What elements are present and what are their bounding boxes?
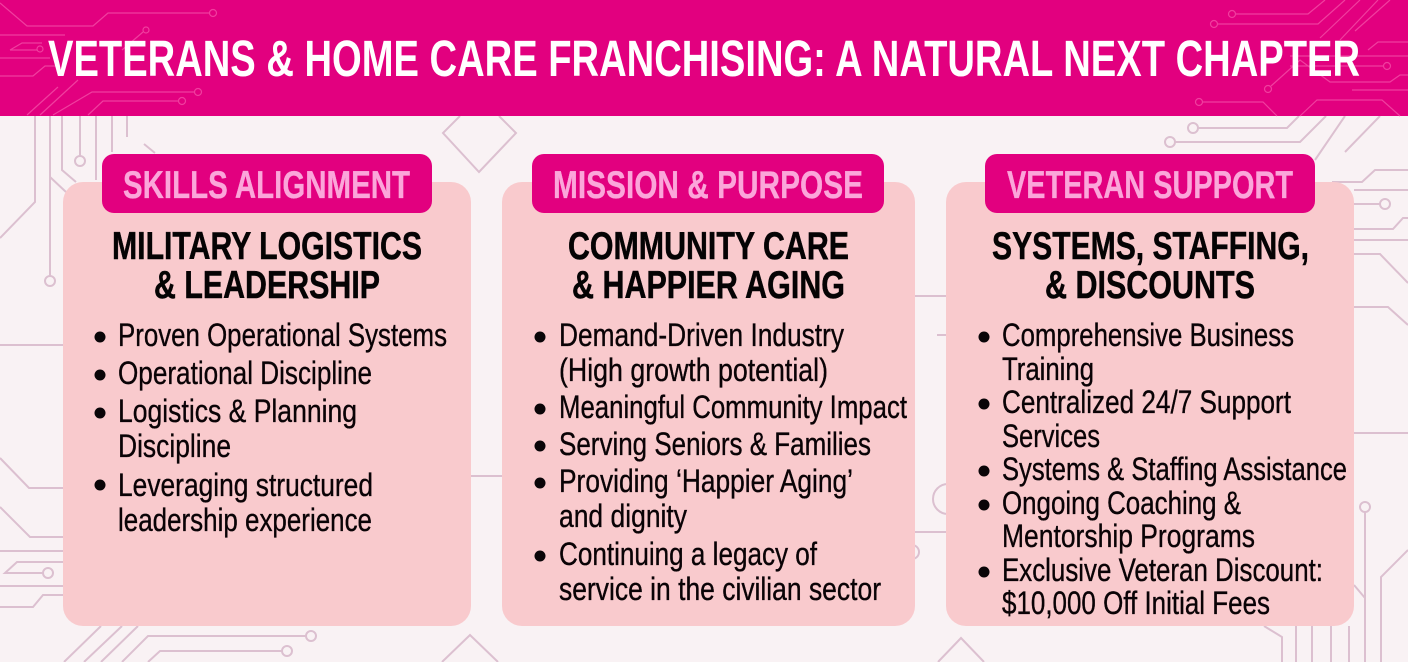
bullet list: skills: Proven Operational Systems (118, 317, 447, 353)
bullet list: mission: and dignity (559, 498, 687, 534)
heading: community care and happier aging: COMMUNITY CARE (568, 225, 849, 268)
bullet list: skills: Logistics & Planning (118, 393, 357, 429)
bullet list: support: Mentorship Programs (1002, 518, 1255, 554)
heading: military logistics and leadership (112, 225, 422, 307)
bullet list: mission: Continuing a legacy of (559, 536, 817, 572)
tab: skills alignment (102, 154, 432, 213)
header banner (0, 0, 1408, 116)
heading: systems, staffing and discounts (992, 225, 1309, 307)
bullet list: support: Centralized 24/7 Support (1002, 384, 1291, 420)
heading: military logistics and leadership: & LEADERSHIP (154, 264, 380, 307)
tab: skills alignment: SKILLS ALIGNMENT (123, 164, 410, 207)
heading: systems, staffing and discounts: SYSTEMS, STAFFING, (992, 225, 1309, 268)
bullet list: mission: (High growth potential) (559, 352, 828, 388)
bullet list: support: Exclusive Veteran Discount: (1002, 552, 1323, 588)
panel: mission and purpose (502, 154, 915, 626)
bullet list: mission (534, 317, 907, 607)
bullet list: skills: Leveraging structured (118, 467, 373, 503)
bullet list: support: Ongoing Coaching & (1002, 485, 1241, 521)
bullet list: support: Comprehensive Business (1002, 317, 1294, 353)
panel: skills alignment (63, 154, 471, 626)
bullet list: mission: Meaningful Community Impact (559, 389, 907, 425)
bullet list: skills (94, 317, 447, 538)
heading: community care and happier aging: & HAPPIER AGING (572, 264, 845, 307)
heading: community care and happier aging (568, 225, 849, 307)
bullet list: mission: Demand-Driven Industry (559, 317, 844, 353)
tab: mission and purpose: MISSION & PURPOSE (553, 164, 863, 207)
bullet list: mission: Serving Seniors & Families (559, 426, 871, 462)
tab: mission and purpose (532, 154, 884, 213)
bullet list: support (978, 317, 1347, 621)
bullet list: mission: service in the civilian sector (559, 571, 881, 607)
bullet list: support: $10,000 Off Initial Fees (1002, 585, 1270, 621)
heading: military logistics and leadership: MILITARY LOGISTICS (112, 225, 422, 268)
bullet list: skills: Discipline (118, 428, 231, 464)
bullet list: mission: Providing ‘Happier Aging’ (559, 463, 853, 499)
tab: veteran support: VETERAN SUPPORT (1007, 164, 1293, 207)
bullet list: skills: Operational Discipline (118, 355, 372, 391)
panel: veteran support (946, 154, 1354, 626)
tab: veteran support (985, 154, 1315, 213)
heading: systems, staffing and discounts: & DISCOUNTS (1045, 264, 1255, 307)
bullet list: support: Services (1002, 418, 1100, 454)
bullet list: support: Training (1002, 351, 1094, 387)
bullet list: skills: leadership experience (118, 502, 372, 538)
